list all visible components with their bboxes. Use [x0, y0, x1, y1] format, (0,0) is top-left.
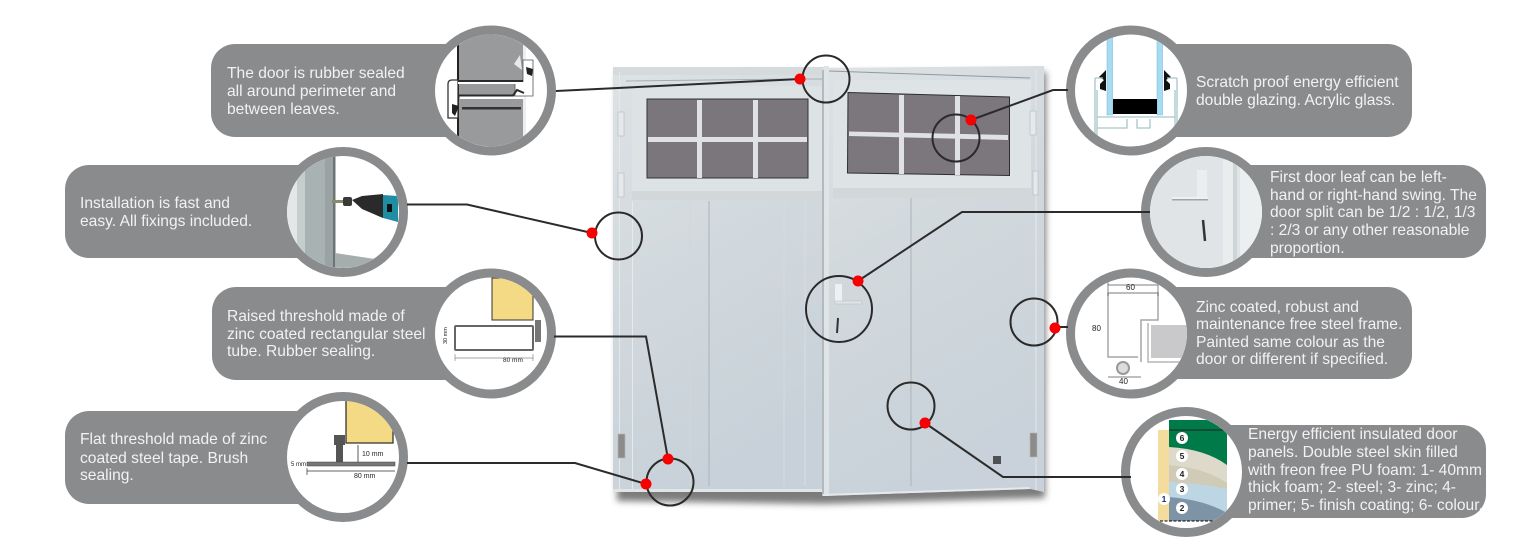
detail circle — [430, 273, 552, 394]
threshold section drawing — [291, 401, 395, 480]
frame section drawing: 80 — [1092, 324, 1101, 333]
pill — [1122, 287, 1412, 379]
red marker dots — [586, 74, 1060, 490]
callout: raised threshold — [212, 273, 552, 394]
text: Raised threshold made of — [227, 308, 405, 325]
text: thick foam; 2- steel; 3- zinc; 4- — [1248, 479, 1456, 496]
text: primer; 5- finish coating; 6- colour. — [1248, 497, 1483, 514]
threshold section drawing: 30 mm — [443, 327, 449, 344]
leader lines — [407, 79, 1150, 484]
panel layers drawing: 4 — [1180, 469, 1185, 479]
text: tube. Rubber sealing. — [227, 343, 375, 360]
text: Installation is fast and — [80, 195, 230, 212]
text: Scratch proof energy efficient — [1196, 74, 1399, 91]
detail circle — [1126, 412, 1246, 532]
text: maintenance free steel frame. — [1196, 316, 1402, 333]
callout: flat threshold — [65, 396, 404, 518]
text: panels. Double steel skin filled — [1248, 444, 1458, 461]
panel layers drawing: 1 — [1162, 494, 1167, 504]
text: hand or right-hand swing. The — [1270, 187, 1477, 204]
text: The door is rubber sealed — [227, 65, 405, 82]
right window — [848, 92, 1010, 176]
threshold section drawing — [443, 278, 541, 364]
left window — [647, 99, 808, 178]
handle photo — [1149, 156, 1263, 268]
pill — [65, 411, 345, 504]
detail circle — [1146, 152, 1266, 272]
pill — [211, 44, 501, 137]
hinges and lock hardware — [618, 111, 1038, 464]
drill photo — [287, 156, 398, 270]
panel layers drawing: 5 — [1180, 451, 1185, 461]
frame section drawing: 60 — [1126, 283, 1135, 292]
frame section drawing — [1092, 282, 1190, 386]
text: all around perimeter and — [227, 83, 396, 100]
text: First door leaf can be left- — [1270, 169, 1447, 186]
text: zinc coated rectangular steel — [227, 326, 426, 343]
text: Energy efficient insulated door — [1248, 426, 1458, 443]
callout: insulated panels — [1126, 412, 1486, 532]
right door leaf — [823, 66, 1044, 496]
pill — [212, 287, 501, 380]
panel layers drawing: 3 — [1180, 484, 1185, 494]
left door leaf — [613, 67, 825, 492]
magnifier circles on door — [595, 56, 1058, 506]
pill — [65, 165, 345, 258]
threshold section drawing: 10 mm — [362, 451, 384, 458]
threshold section drawing: 5 mm — [291, 462, 306, 468]
text: : 2/3 or any other reasonable — [1270, 222, 1469, 239]
text: coated steel tape. Brush — [80, 450, 248, 467]
text: between leaves. — [227, 101, 340, 118]
detail circle — [430, 30, 552, 151]
callout: door leaf swing — [1146, 152, 1486, 272]
detail circle — [1070, 30, 1192, 151]
callout: rubber seal — [211, 30, 552, 155]
callout: double glazing — [1070, 30, 1412, 151]
threshold section drawing: 80 mm — [503, 357, 523, 364]
detail circle — [1070, 273, 1192, 394]
text: door or different if specified. — [1196, 351, 1388, 368]
pill — [1176, 425, 1486, 518]
text: easy. All fixings included. — [80, 213, 252, 230]
callout: steel frame — [1070, 273, 1412, 394]
panel layers drawing — [1158, 420, 1227, 522]
text: Painted same colour as the — [1196, 334, 1385, 351]
text: sealing. — [80, 467, 134, 484]
text: door split can be 1/2 : 1/2, 1/3 — [1270, 204, 1475, 221]
callout: installation — [65, 152, 404, 272]
text: Flat threshold made of zinc — [80, 431, 267, 448]
pill — [1196, 165, 1486, 258]
door shadow — [617, 72, 1046, 504]
seal section drawing — [448, 30, 533, 155]
door illustration — [613, 66, 1046, 504]
panel layers drawing: 6 — [1180, 433, 1185, 443]
detail circle — [282, 152, 404, 272]
text: proportion. — [1270, 240, 1345, 257]
threshold section drawing: 80 mm — [354, 473, 376, 480]
text: double glazing. Acrylic glass. — [1196, 92, 1395, 109]
panel layers drawing: 2 — [1180, 503, 1185, 513]
glazing section drawing — [1095, 34, 1177, 135]
text: Zinc coated, robust and — [1196, 299, 1359, 316]
detail circle — [282, 396, 404, 518]
frame section drawing: 40 — [1119, 377, 1128, 386]
text: with freon free PU foam: 1- 40mm — [1247, 462, 1482, 479]
pill — [1122, 44, 1412, 137]
